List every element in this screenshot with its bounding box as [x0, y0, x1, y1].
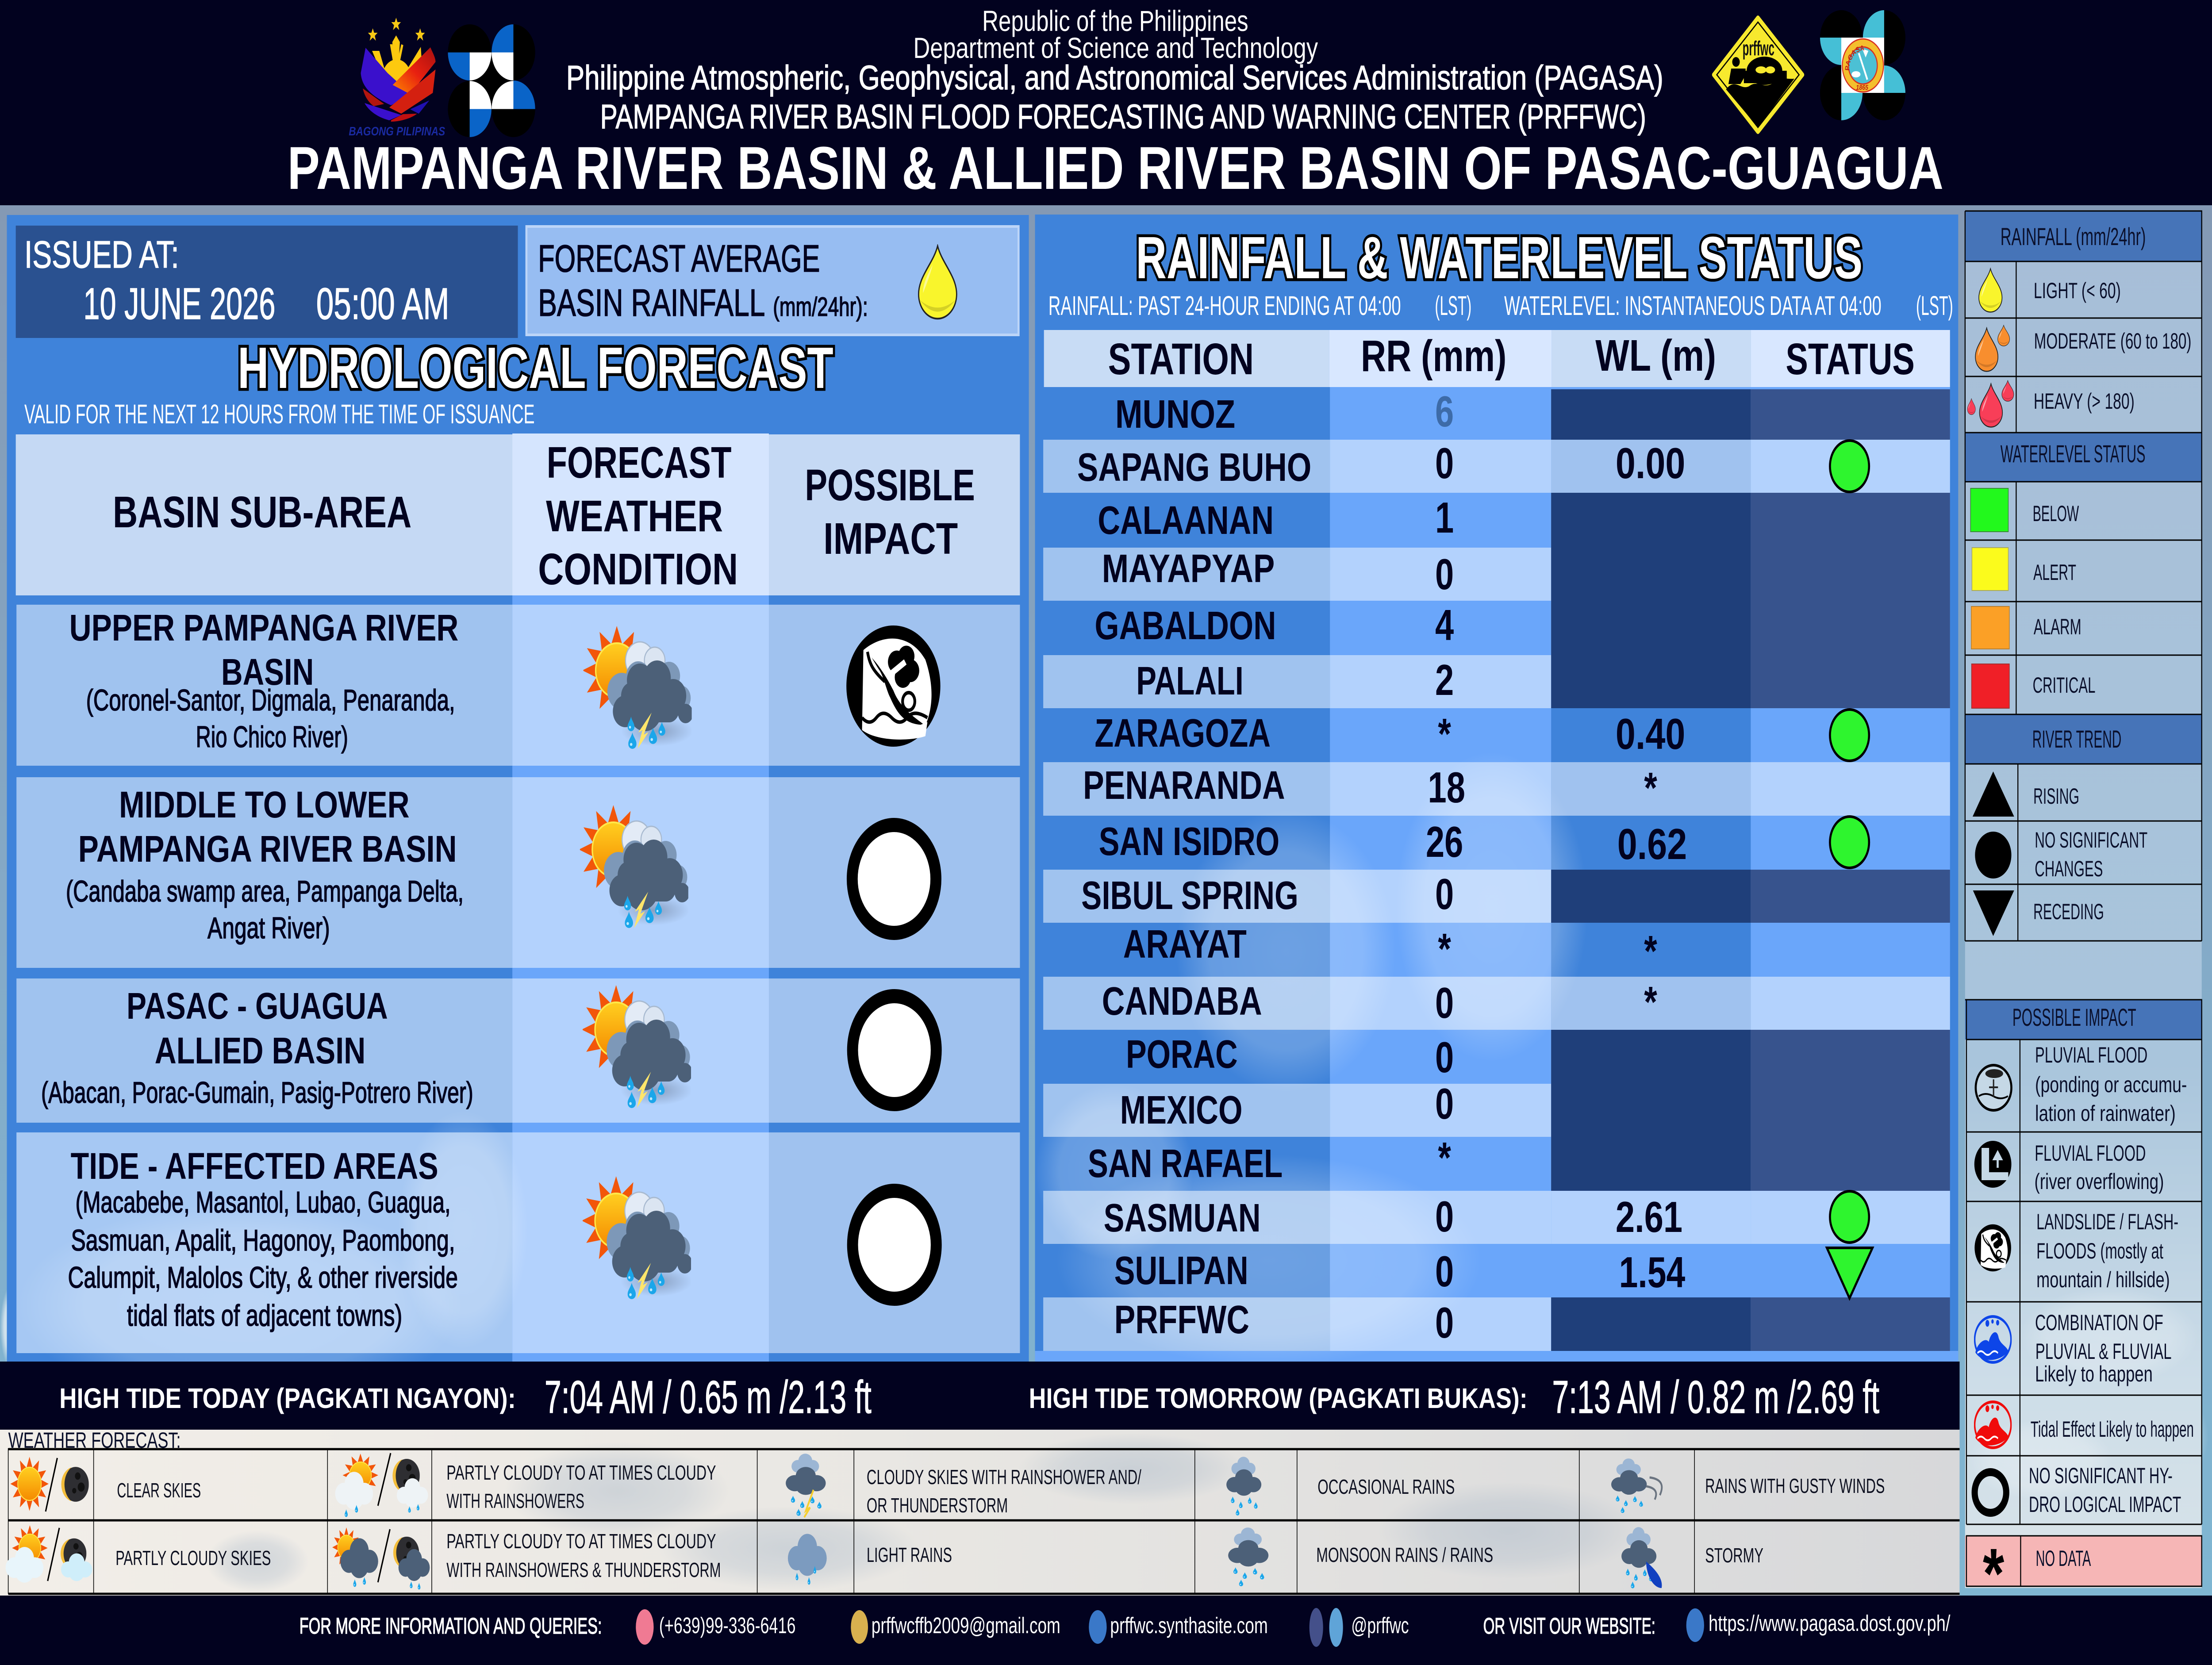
icon: tidal effect [1975, 1402, 2011, 1448]
waterlevel values: 1.54 [1619, 1248, 1686, 1297]
footer: https://www.pagasa.dost.gov.ph/ [1709, 1611, 1951, 1636]
icon: PAGASA logo [1820, 10, 1905, 120]
text: data time notes: (LST) [1435, 291, 1471, 321]
high tide bar: 7:04 AM / 0.65 m /2.13 ft [545, 1371, 872, 1423]
item: rains with gusty winds: RAINS WITH GUSTY WINDS [1705, 1475, 1885, 1497]
legend: possible impact: (ponding or accumu- [2035, 1073, 2187, 1097]
panel: issued at: 05:00 AM [316, 279, 449, 328]
icon: website globe [1686, 1608, 1704, 1642]
table header: WEATHER [546, 491, 723, 541]
icon: partly cloudy with thunderstorm [582, 985, 692, 1108]
item: monsoon rains: MONSOON RAINS / RAINS [1316, 1544, 1493, 1566]
station names: SAPANG BUHO [1077, 445, 1311, 490]
panel: issued at [16, 226, 518, 338]
row: upper pampanga [69, 607, 941, 754]
table header: STATION [1108, 334, 1254, 384]
panel: forecast average basin rainfall: BASIN RAINFALL [538, 282, 765, 324]
item: rains with gusty winds [1611, 1458, 1885, 1513]
legend: river trend: RIVER TREND [2032, 725, 2121, 753]
rainfall values: 0 [1435, 1033, 1454, 1082]
legend: possible impact: lation of rainwater) [2035, 1101, 2176, 1126]
item: stormy [1621, 1527, 1763, 1588]
item: partly cloudy with rainshowers and thunderstorm: PARTLY CLOUDY TO AT TIMES CLOUDY [446, 1530, 716, 1553]
high tide bar [0, 1362, 1959, 1430]
rainfall values: 0 [1435, 1193, 1454, 1241]
legend: river trend: NO SIGNIFICANT [2035, 828, 2147, 852]
legend: possible impact: COMBINATION OF [2035, 1311, 2163, 1335]
rainfall values: 0 [1435, 1299, 1454, 1347]
row: middle to lower pampanga [66, 784, 936, 945]
row: middle to lower pampanga: PAMPANGA RIVER BASIN [78, 828, 457, 870]
legend: possible impact: DRO LOGICAL IMPACT [2029, 1492, 2181, 1517]
station names: ZARAGOZA [1094, 711, 1271, 756]
icon: PRFFWC sign [1714, 18, 1802, 132]
row: upper pampanga: BASIN [221, 651, 314, 693]
icon: facebook and twitter [1310, 1608, 1343, 1647]
item: light rains [788, 1534, 952, 1584]
row: pasac guagua: ALLIED BASIN [155, 1030, 365, 1071]
table header: CONDITION [538, 544, 738, 594]
item: occasional rains: OCCASIONAL RAINS [1317, 1476, 1455, 1498]
legend: possible impact: Likely to happen [2035, 1362, 2153, 1386]
icon: landslide impact [846, 625, 941, 747]
panel: forecast average basin rainfall: (mm/24hr): [773, 292, 868, 322]
footer: @prffwc [1351, 1613, 1409, 1638]
rainfall values: * [1438, 925, 1452, 973]
table header: BASIN SUB-AREA [113, 487, 411, 537]
legend: possible impact: NO DATA [2036, 1546, 2091, 1571]
header text: department: Department of Science and Technology [913, 32, 1318, 65]
station names: SULIPAN [1114, 1249, 1248, 1293]
icon: pluvial flood [1976, 1065, 2012, 1110]
row: pasac guagua [41, 985, 936, 1109]
station names: MUNOZ [1115, 392, 1235, 437]
text: data time notes: WATERLEVEL: INSTANTANEOUS DATA AT 04:00 [1504, 291, 1882, 321]
rainfall values: 18 [1428, 763, 1465, 812]
legend: possible impact: PLUVIAL & FLUVIAL [2035, 1339, 2172, 1364]
panel: hydrological forecast [7, 215, 1029, 1407]
text: validity note: VALID FOR THE NEXT 12 HOURS FROM THE TIME OF ISSUANCE [24, 399, 535, 429]
heading: rainfall and waterlevel status: RAINFALL & WATERLEVEL STATUS [1136, 224, 1863, 291]
item: partly cloudy skies: PARTLY CLOUDY SKIES [115, 1547, 271, 1569]
row: middle to lower pampanga: (Candaba swamp area, Pampanga Delta, [66, 875, 464, 908]
icon: PAGASA logo: PAGASA [1844, 44, 1865, 71]
station names: PRFFWC [1114, 1298, 1249, 1342]
row: pasac guagua: PASAC - GUAGUA [127, 985, 388, 1027]
item: partly cloudy to at times cloudy with rainshowers [335, 1453, 716, 1517]
legend: rainfall: RAINFALL (mm/24hr) [2001, 223, 2146, 250]
row: middle to lower pampanga: MIDDLE TO LOWER [119, 784, 410, 825]
panel: rainfall and waterlevel status [1035, 215, 1958, 1367]
waterlevel values [1616, 439, 1687, 1297]
icon: globe [1089, 1610, 1107, 1644]
rainfall values: * [1438, 710, 1452, 758]
icon: no significant impact [1975, 1472, 2006, 1513]
icon: no data: * [1983, 1534, 2005, 1613]
rainfall values [1426, 387, 1465, 1347]
legend: possible impact: PLUVIAL FLOOD [2035, 1043, 2147, 1067]
station names: MEXICO [1120, 1088, 1243, 1132]
item: partly cloudy to at times cloudy with rainshowers: WITH RAINSHOWERS [446, 1490, 584, 1512]
high tide bar: 7:13 AM / 0.82 m /2.69 ft [1552, 1371, 1879, 1423]
row: tide affected areas: (Macabebe, Masantol, Lubao, Guagua, [76, 1185, 451, 1219]
legend: river trend: RISING [2033, 784, 2079, 809]
station names: MAYAPYAP [1102, 547, 1275, 591]
waterlevel values: 0.62 [1617, 820, 1687, 868]
row: tide affected areas: tidal flats of adjacent towns) [127, 1299, 402, 1332]
table header [1044, 330, 1950, 387]
rainfall values: 0 [1435, 1080, 1454, 1128]
station names: SAN ISIDRO [1099, 820, 1279, 864]
panel: issued at: 10 JUNE 2026 [83, 279, 275, 328]
station names: GABALDON [1094, 604, 1276, 648]
status markers [1827, 441, 1873, 1298]
item: monsoon rains [1228, 1527, 1493, 1586]
weather forecast legend [0, 1428, 1959, 1596]
icon: no significant impact [853, 996, 936, 1104]
legend: waterlevel status [1970, 440, 2146, 708]
header text: PRFFWC: PAMPANGA RIVER BASIN FLOOD FORECASTING AND WARNING CENTER (PRFFWC) [600, 98, 1646, 136]
text: data time notes: RAINFALL: PAST 24-HOUR ENDING AT 04:00 [1048, 291, 1401, 321]
legend: waterlevel status: WATERLEVEL STATUS [2001, 440, 2146, 468]
icon: fluvial flood [1974, 1141, 2012, 1188]
rainfall values: 0 [1435, 979, 1454, 1027]
rainfall values: 0 [1435, 870, 1454, 918]
footer [0, 1596, 2212, 1665]
title: PAMPANGA RIVER BASIN & ALLIED RIVER BASIN OF PASAC-GUAGUA [288, 134, 1943, 202]
icon: DOST logo [448, 24, 535, 137]
text: data time notes: (LST) [1916, 291, 1953, 321]
station names: ARAYAT [1123, 922, 1247, 967]
row: tide affected areas [68, 1145, 936, 1332]
row: middle to lower pampanga: Angat River) [207, 911, 330, 945]
legend: possible impact: mountain / hillside) [2036, 1268, 2170, 1292]
station names: CANDABA [1102, 979, 1262, 1024]
panel: forecast average basin rainfall [526, 226, 1018, 335]
station names: SASMUAN [1104, 1196, 1261, 1240]
text: data time notes [1048, 291, 1953, 321]
waterlevel values: * [1644, 978, 1658, 1026]
icon: combination of pluvial and fluvial [1975, 1316, 2011, 1362]
icon: partly cloudy with thunderstorm [582, 626, 693, 749]
table header: STATUS [1786, 334, 1915, 384]
header text: PAGASA: Philippine Atmospheric, Geophysical, and Astronomical Services Administration (PAGASA) [566, 59, 1663, 97]
item: clear skies [10, 1457, 201, 1512]
legend: river trend [1973, 725, 2147, 936]
rainfall values: 26 [1426, 818, 1463, 866]
rainfall values: 0 [1435, 439, 1454, 487]
station names: PALALI [1136, 659, 1244, 703]
legend: waterlevel status: CRITICAL [2033, 673, 2095, 698]
high tide bar: HIGH TIDE TOMORROW (PAGKATI BUKAS): [1029, 1383, 1528, 1415]
row: upper pampanga: (Coronel-Santor, Digmala, Penaranda, [86, 683, 455, 717]
row backgrounds [16, 605, 1020, 1353]
table stripes [1043, 440, 1950, 1351]
legend: possible impact [1974, 1004, 2194, 1613]
header text: republic: Republic of the Philippines [982, 5, 1248, 38]
item: partly cloudy to at times cloudy with rainshowers: PARTLY CLOUDY TO AT TIMES CLOUDY [446, 1462, 716, 1484]
panel: issued at: ISSUED AT: [24, 234, 179, 276]
legend: possible impact: FLOODS (mostly at [2036, 1239, 2163, 1263]
legend: possible impact: LANDSLIDE / FLASH- [2036, 1210, 2178, 1234]
legend: waterlevel status: ALARM [2034, 615, 2081, 639]
panel: forecast average basin rainfall: FORECAST AVERAGE [538, 238, 820, 280]
icon: Bagong Pilipinas logo: BAGONG PILIPINAS [349, 124, 445, 138]
legend: possible impact: FLUVIAL FLOOD [2035, 1141, 2146, 1166]
rainfall values: * [1438, 1134, 1452, 1182]
legend: waterlevel status: BELOW [2033, 502, 2079, 526]
header band [0, 0, 2212, 205]
icon: phone [636, 1609, 654, 1645]
item: occasional rains [1226, 1457, 1455, 1515]
table header: POSSIBLE [805, 460, 975, 510]
text: weather forecast label: WEATHER FORECAST: [8, 1428, 181, 1453]
rainfall values: 6 [1435, 387, 1454, 436]
legend [1965, 211, 2202, 1613]
station names [1077, 392, 1311, 1342]
waterlevel values: 2.61 [1616, 1193, 1682, 1241]
footer: prffwcffb2009@gmail.com [872, 1613, 1060, 1638]
waterlevel values: * [1644, 764, 1658, 812]
high tide bar: HIGH TIDE TODAY (PAGKATI NGAYON): [59, 1383, 516, 1415]
table header: IMPACT [823, 514, 958, 563]
item: partly cloudy skies [6, 1525, 271, 1583]
table header: WL (m) [1595, 330, 1716, 380]
rainfall values: 2 [1435, 656, 1454, 704]
station names: PENARANDA [1083, 763, 1285, 808]
row: tide affected areas: Calumpit, Malolos City, & other riverside [68, 1261, 458, 1294]
footer: (+639)99-336-6416 [659, 1613, 795, 1638]
rainfall values: 0 [1435, 1247, 1454, 1296]
item: partly cloudy with rainshowers and thunderstorm [332, 1527, 721, 1590]
table header [16, 434, 1020, 595]
legend: rainfall: HEAVY (> 180) [2034, 389, 2135, 414]
no-data dark cells [1551, 389, 1950, 1351]
waterlevel values: * [1644, 927, 1658, 975]
item: cloudy skies with rainshower and or thunderstorm: CLOUDY SKIES WITH RAINSHOWER AND/ [867, 1466, 1141, 1489]
footer: OR VISIT OUR WEBSITE: [1483, 1613, 1655, 1638]
row: tide affected areas: Sasmuan, Apalit, Hagonoy, Paombong, [71, 1224, 455, 1257]
item: stormy: STORMY [1705, 1544, 1763, 1567]
item: clear skies: CLEAR SKIES [117, 1479, 201, 1502]
row: upper pampanga: UPPER PAMPANGA RIVER [69, 607, 458, 648]
icon: no significant impact [853, 1191, 936, 1299]
waterlevel values: 0.40 [1616, 710, 1685, 758]
footer: FOR MORE INFORMATION AND QUERIES: [300, 1613, 602, 1638]
item: cloudy skies with rainshower and or thunderstorm [786, 1454, 1141, 1517]
icon: landslide flash flood [1974, 1224, 2011, 1271]
icon: PRFFWC sign: prffwc [1743, 37, 1774, 60]
row: tide affected areas: TIDE - AFFECTED AREAS [71, 1145, 438, 1187]
legend: possible impact: NO SIGNIFICANT HY- [2029, 1464, 2173, 1488]
footer: prffwc.synthasite.com [1110, 1613, 1268, 1638]
waterlevel values: 0.00 [1616, 439, 1685, 487]
station names: SAN RAFAEL [1088, 1142, 1283, 1186]
table header: FORECAST [547, 437, 731, 487]
rainfall values: 0 [1435, 550, 1454, 598]
station names: SIBUL SPRING [1081, 874, 1298, 918]
legend: rainfall [1967, 223, 2191, 427]
icon: PAGASA logo: 1865 [1856, 84, 1869, 92]
icon: no significant impact [852, 825, 936, 933]
table header: RR (mm) [1361, 331, 1506, 380]
item: cloudy skies with rainshower and or thunderstorm: OR THUNDERSTORM [867, 1494, 1008, 1517]
legend: possible impact: (river overflowing) [2034, 1170, 2164, 1194]
station names: PORAC [1126, 1032, 1238, 1077]
station names: CALAANAN [1098, 499, 1274, 543]
item: partly cloudy with rainshowers and thunderstorm: WITH RAINSHOWERS & THUNDERSTORM [446, 1559, 721, 1581]
legend: river trend: RECEDING [2033, 900, 2104, 924]
legend: rainfall: LIGHT (< 60) [2034, 279, 2121, 303]
icon: email [851, 1610, 868, 1644]
heading: hydrological forecast: HYDROLOGICAL FORECAST [238, 336, 833, 401]
icon: partly cloudy with thunderstorm [579, 805, 690, 928]
item: light rains: LIGHT RAINS [867, 1544, 952, 1566]
row: upper pampanga: Rio Chico River) [196, 720, 348, 754]
row: pasac guagua: (Abacan, Porac-Gumain, Pasig-Potrero River) [41, 1076, 473, 1109]
rainfall values: 4 [1435, 601, 1454, 649]
legend: river trend: CHANGES [2035, 857, 2103, 881]
icon: partly cloudy with thunderstorm [582, 1176, 692, 1299]
rainfall values: 1 [1435, 494, 1454, 542]
legend: waterlevel status: ALERT [2033, 560, 2076, 585]
icon: Bagong Pilipinas logo [349, 18, 445, 138]
legend: possible impact: POSSIBLE IMPACT [2012, 1004, 2136, 1031]
